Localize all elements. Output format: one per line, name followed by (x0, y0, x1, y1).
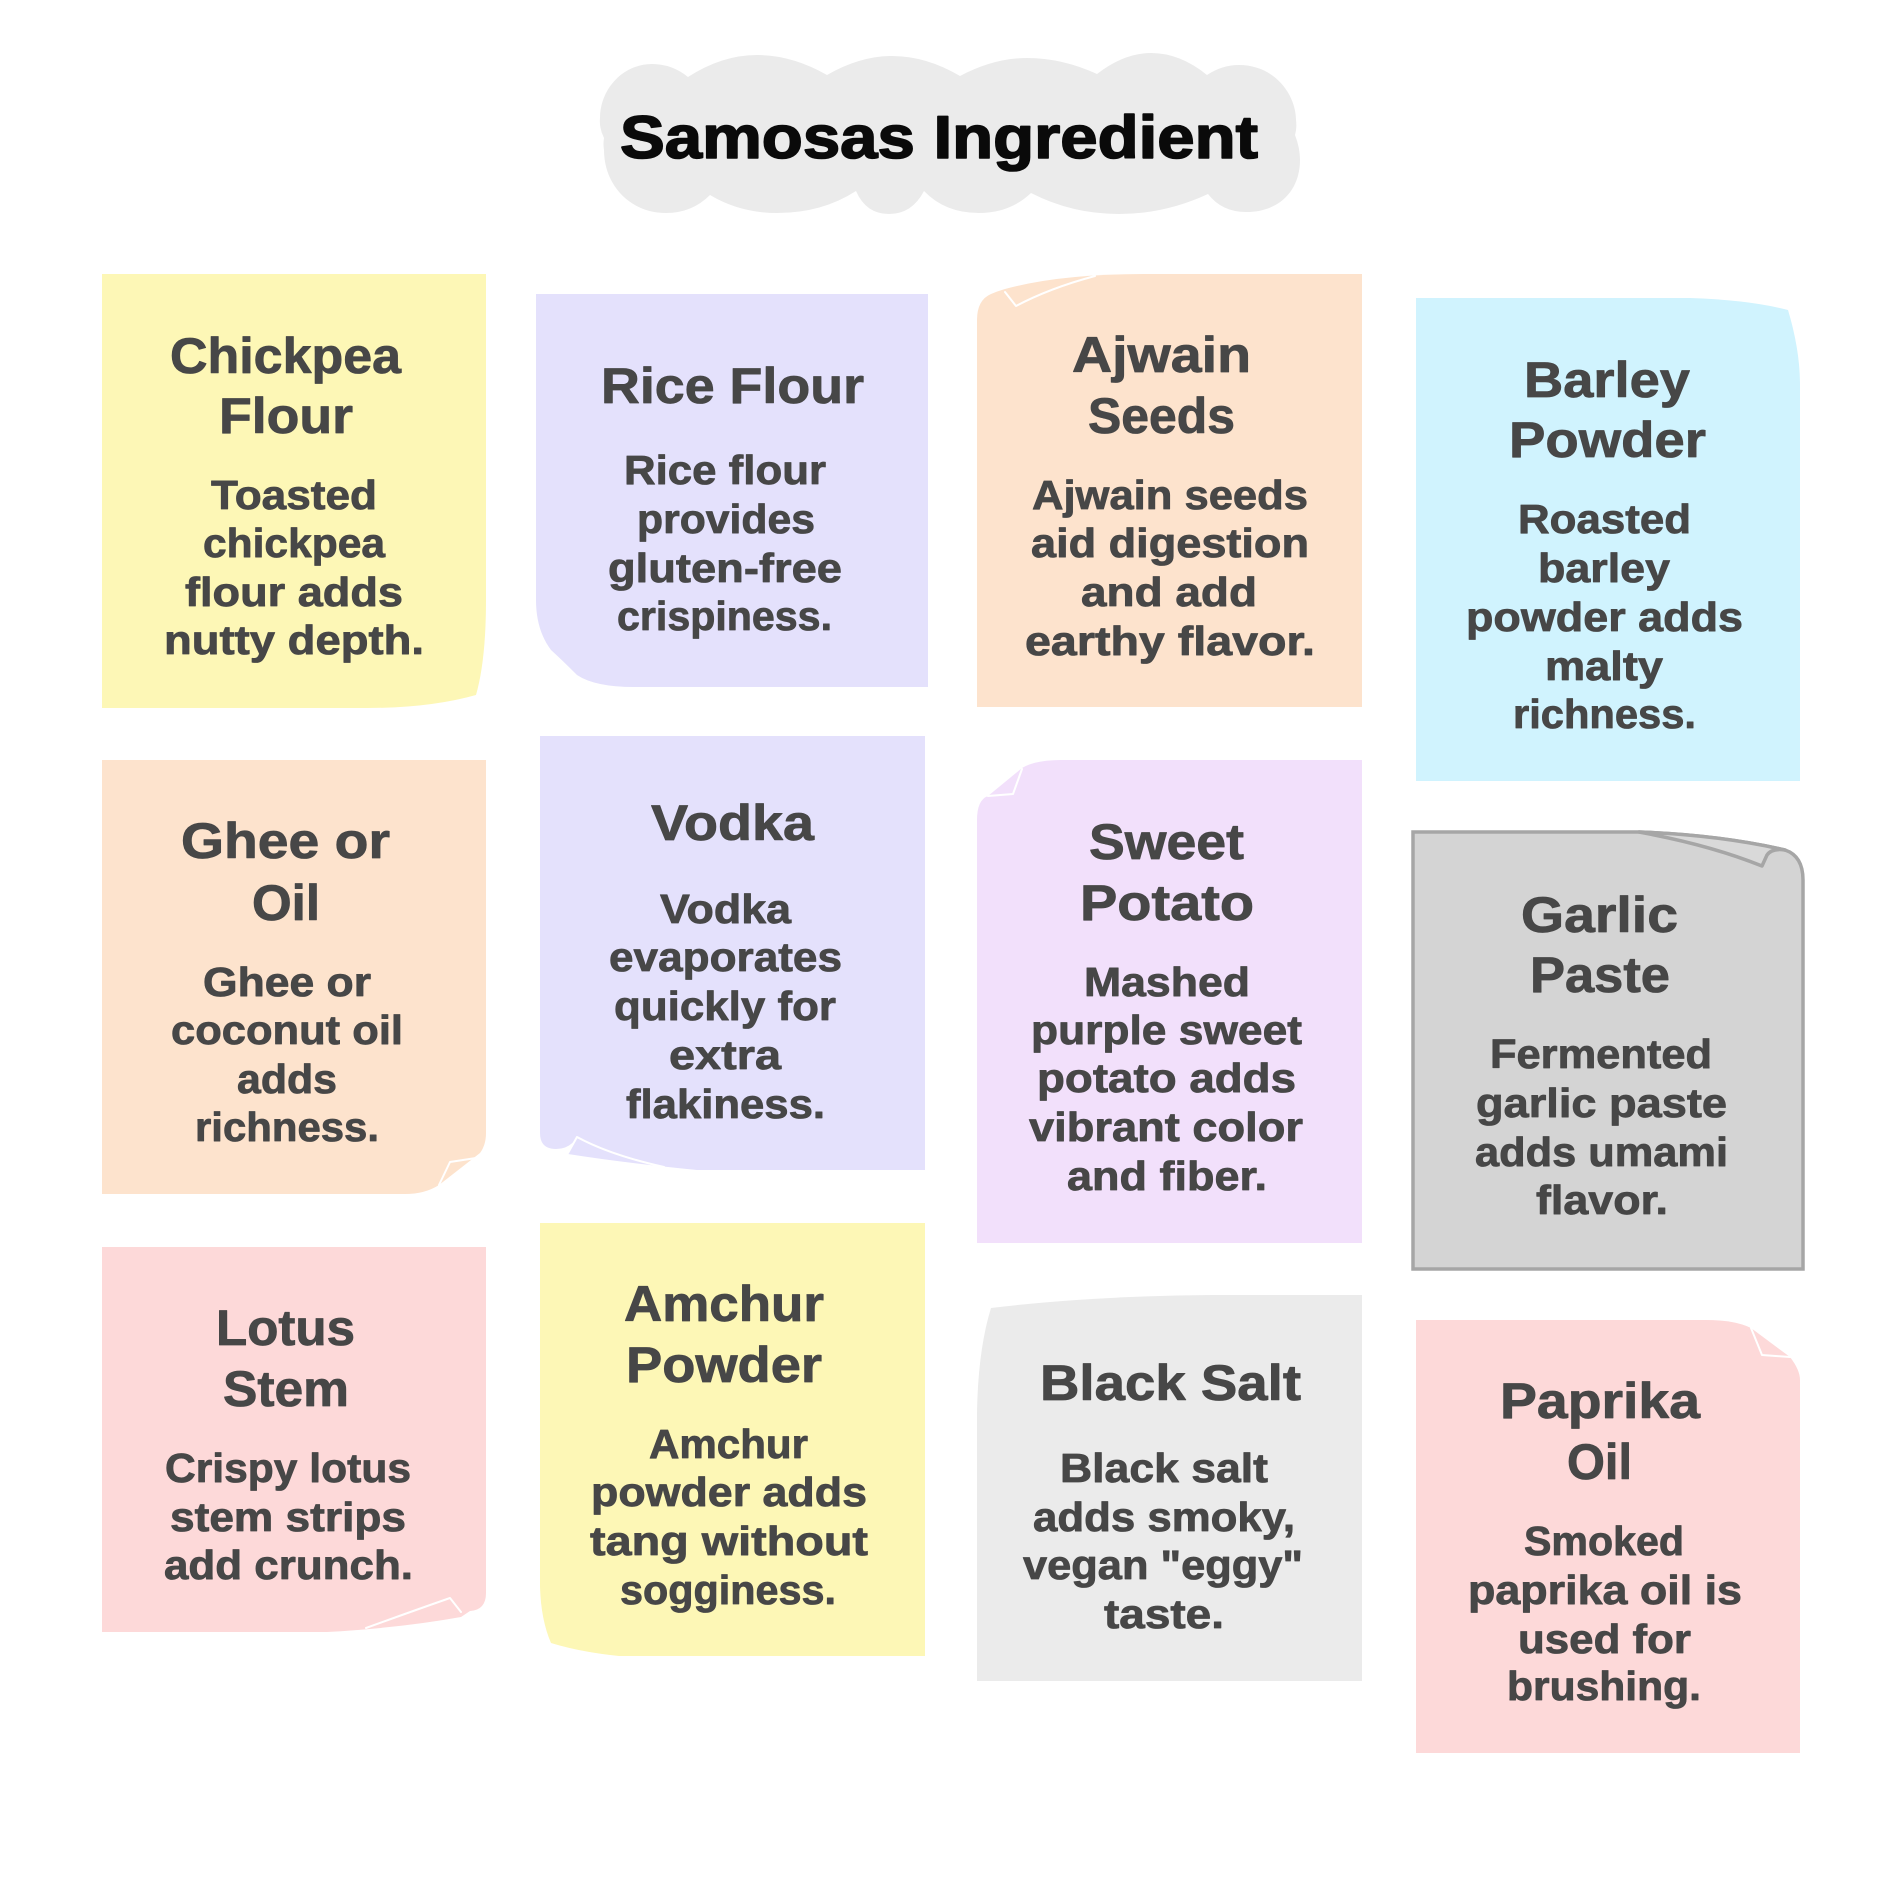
card background (1413, 832, 1803, 1269)
description: potato adds (1037, 1055, 1296, 1101)
panel: Ghee or Oil (102, 760, 486, 1194)
description: coconut oil (171, 1007, 403, 1053)
page curl (988, 769, 1022, 796)
card background (1416, 1320, 1800, 1753)
description: add crunch. (164, 1542, 413, 1588)
description: Rice flour (624, 447, 826, 493)
description: Smoked (1524, 1518, 1684, 1564)
heading (1080, 814, 1254, 931)
description (608, 447, 842, 639)
description: flavor. (1536, 1177, 1668, 1223)
heading (1509, 352, 1706, 468)
heading: Black Salt (1040, 1355, 1301, 1411)
title (600, 53, 1300, 214)
description: vegan "eggy" (1023, 1542, 1303, 1588)
description: and fiber. (1067, 1153, 1267, 1199)
description: barley (1538, 545, 1670, 591)
description: Fermented (1490, 1031, 1712, 1077)
panel: Ajwain Seeds (977, 274, 1362, 707)
description (164, 1445, 413, 1588)
description: provides (637, 496, 815, 542)
heading (1521, 887, 1678, 1003)
heading: Flour (219, 388, 353, 444)
description: flakiness. (626, 1081, 825, 1127)
description (1023, 1445, 1303, 1637)
description (609, 886, 842, 1127)
description: flour adds (185, 569, 403, 615)
heading (181, 813, 390, 931)
heading: Barley (1524, 352, 1690, 408)
description: powder adds (591, 1469, 867, 1515)
card background (102, 1247, 486, 1632)
description: Vodka (660, 886, 792, 932)
description: taste. (1104, 1591, 1224, 1637)
heading: Powder (1509, 412, 1706, 468)
description: aid digestion (1031, 520, 1309, 566)
description: brushing. (1507, 1663, 1701, 1709)
card background (102, 274, 486, 708)
description: nutty depth. (164, 617, 424, 663)
page curl (1639, 832, 1785, 866)
description: vibrant color (1029, 1104, 1303, 1150)
description: garlic paste (1476, 1080, 1727, 1126)
description: Black salt (1060, 1445, 1268, 1491)
heading (1500, 1373, 1701, 1490)
page curl (366, 1598, 461, 1628)
description: and add (1081, 569, 1257, 615)
heading: Paprika (1500, 1373, 1701, 1429)
description: earthy flavor. (1025, 618, 1315, 664)
panel: Black Salt (977, 1295, 1362, 1681)
heading: Vodka (651, 795, 815, 851)
card background (977, 760, 1362, 1243)
heading (1072, 327, 1251, 444)
description: richness. (195, 1104, 379, 1150)
description: purple sweet (1031, 1007, 1302, 1053)
heading (624, 1276, 824, 1393)
description: chickpea (203, 520, 386, 566)
card background (1416, 298, 1800, 781)
heading: Paste (1530, 947, 1670, 1003)
description: Amchur (649, 1421, 808, 1467)
heading: Amchur (624, 1276, 824, 1332)
description: crispiness. (617, 593, 832, 639)
description: extra (669, 1032, 782, 1078)
panel: Garlic Paste (1413, 832, 1803, 1269)
panel: Amchur Powder (540, 1223, 925, 1656)
description (1025, 472, 1315, 664)
heading: Sweet (1089, 814, 1244, 870)
description: stem strips (170, 1494, 406, 1540)
description: Crispy lotus (165, 1445, 411, 1491)
panel: Vodka (540, 736, 925, 1170)
description: Toasted (211, 472, 377, 518)
heading: Powder (626, 1337, 822, 1393)
description: tang without (590, 1518, 868, 1564)
title text: Samosas Ingredient (620, 104, 1258, 171)
card background (102, 760, 486, 1194)
heading: Stem (223, 1361, 349, 1417)
description: richness. (1513, 691, 1696, 737)
description: evaporates (609, 934, 842, 980)
description: gluten-free (608, 545, 842, 591)
page curl (1751, 1328, 1790, 1357)
description: Ajwain seeds (1032, 472, 1308, 518)
description (1029, 959, 1303, 1199)
panel: Paprika Oil (1416, 1320, 1800, 1753)
description: Ghee or (203, 959, 371, 1005)
heading: Oil (1567, 1434, 1632, 1490)
page curl (568, 1137, 664, 1167)
description (1475, 1031, 1728, 1223)
description: paprika oil is (1468, 1567, 1742, 1613)
description: Mashed (1084, 959, 1250, 1005)
description (1468, 1518, 1742, 1709)
description: quickly for (614, 983, 836, 1029)
description: adds smoky, (1033, 1494, 1295, 1540)
heading (170, 328, 402, 444)
heading (216, 1300, 355, 1417)
heading: Oil (252, 875, 320, 931)
description (590, 1421, 868, 1613)
description (164, 472, 424, 663)
description: malty (1545, 643, 1663, 689)
heading: Potato (1080, 875, 1254, 931)
heading: Rice Flour (601, 358, 864, 414)
description: powder adds (1466, 594, 1743, 640)
heading: Chickpea (170, 328, 402, 384)
heading: Garlic (1521, 887, 1678, 943)
heading: Ghee or (181, 813, 390, 869)
description: used for (1518, 1616, 1691, 1662)
panel: Chickpea Flour (102, 274, 486, 708)
heading: Ajwain (1072, 327, 1251, 383)
page curl (1005, 276, 1095, 306)
panel: Rice Flour (536, 294, 928, 687)
card background (977, 274, 1362, 707)
description (171, 959, 403, 1150)
heading: Seeds (1088, 388, 1235, 444)
description: Roasted (1518, 496, 1691, 542)
panel: Lotus Stem (102, 1247, 486, 1632)
card background (540, 1223, 925, 1656)
description: sogginess. (620, 1567, 836, 1613)
title cloud (600, 53, 1300, 214)
description: adds umami (1475, 1129, 1728, 1175)
description: adds (237, 1056, 337, 1102)
card background (536, 294, 928, 687)
panel: Sweet Potato (977, 760, 1362, 1243)
heading: Lotus (216, 1300, 355, 1356)
card background (540, 736, 925, 1170)
description (1466, 496, 1743, 737)
card background (977, 1295, 1362, 1681)
panel: Barley Powder (1416, 298, 1800, 781)
page curl (439, 1158, 476, 1185)
